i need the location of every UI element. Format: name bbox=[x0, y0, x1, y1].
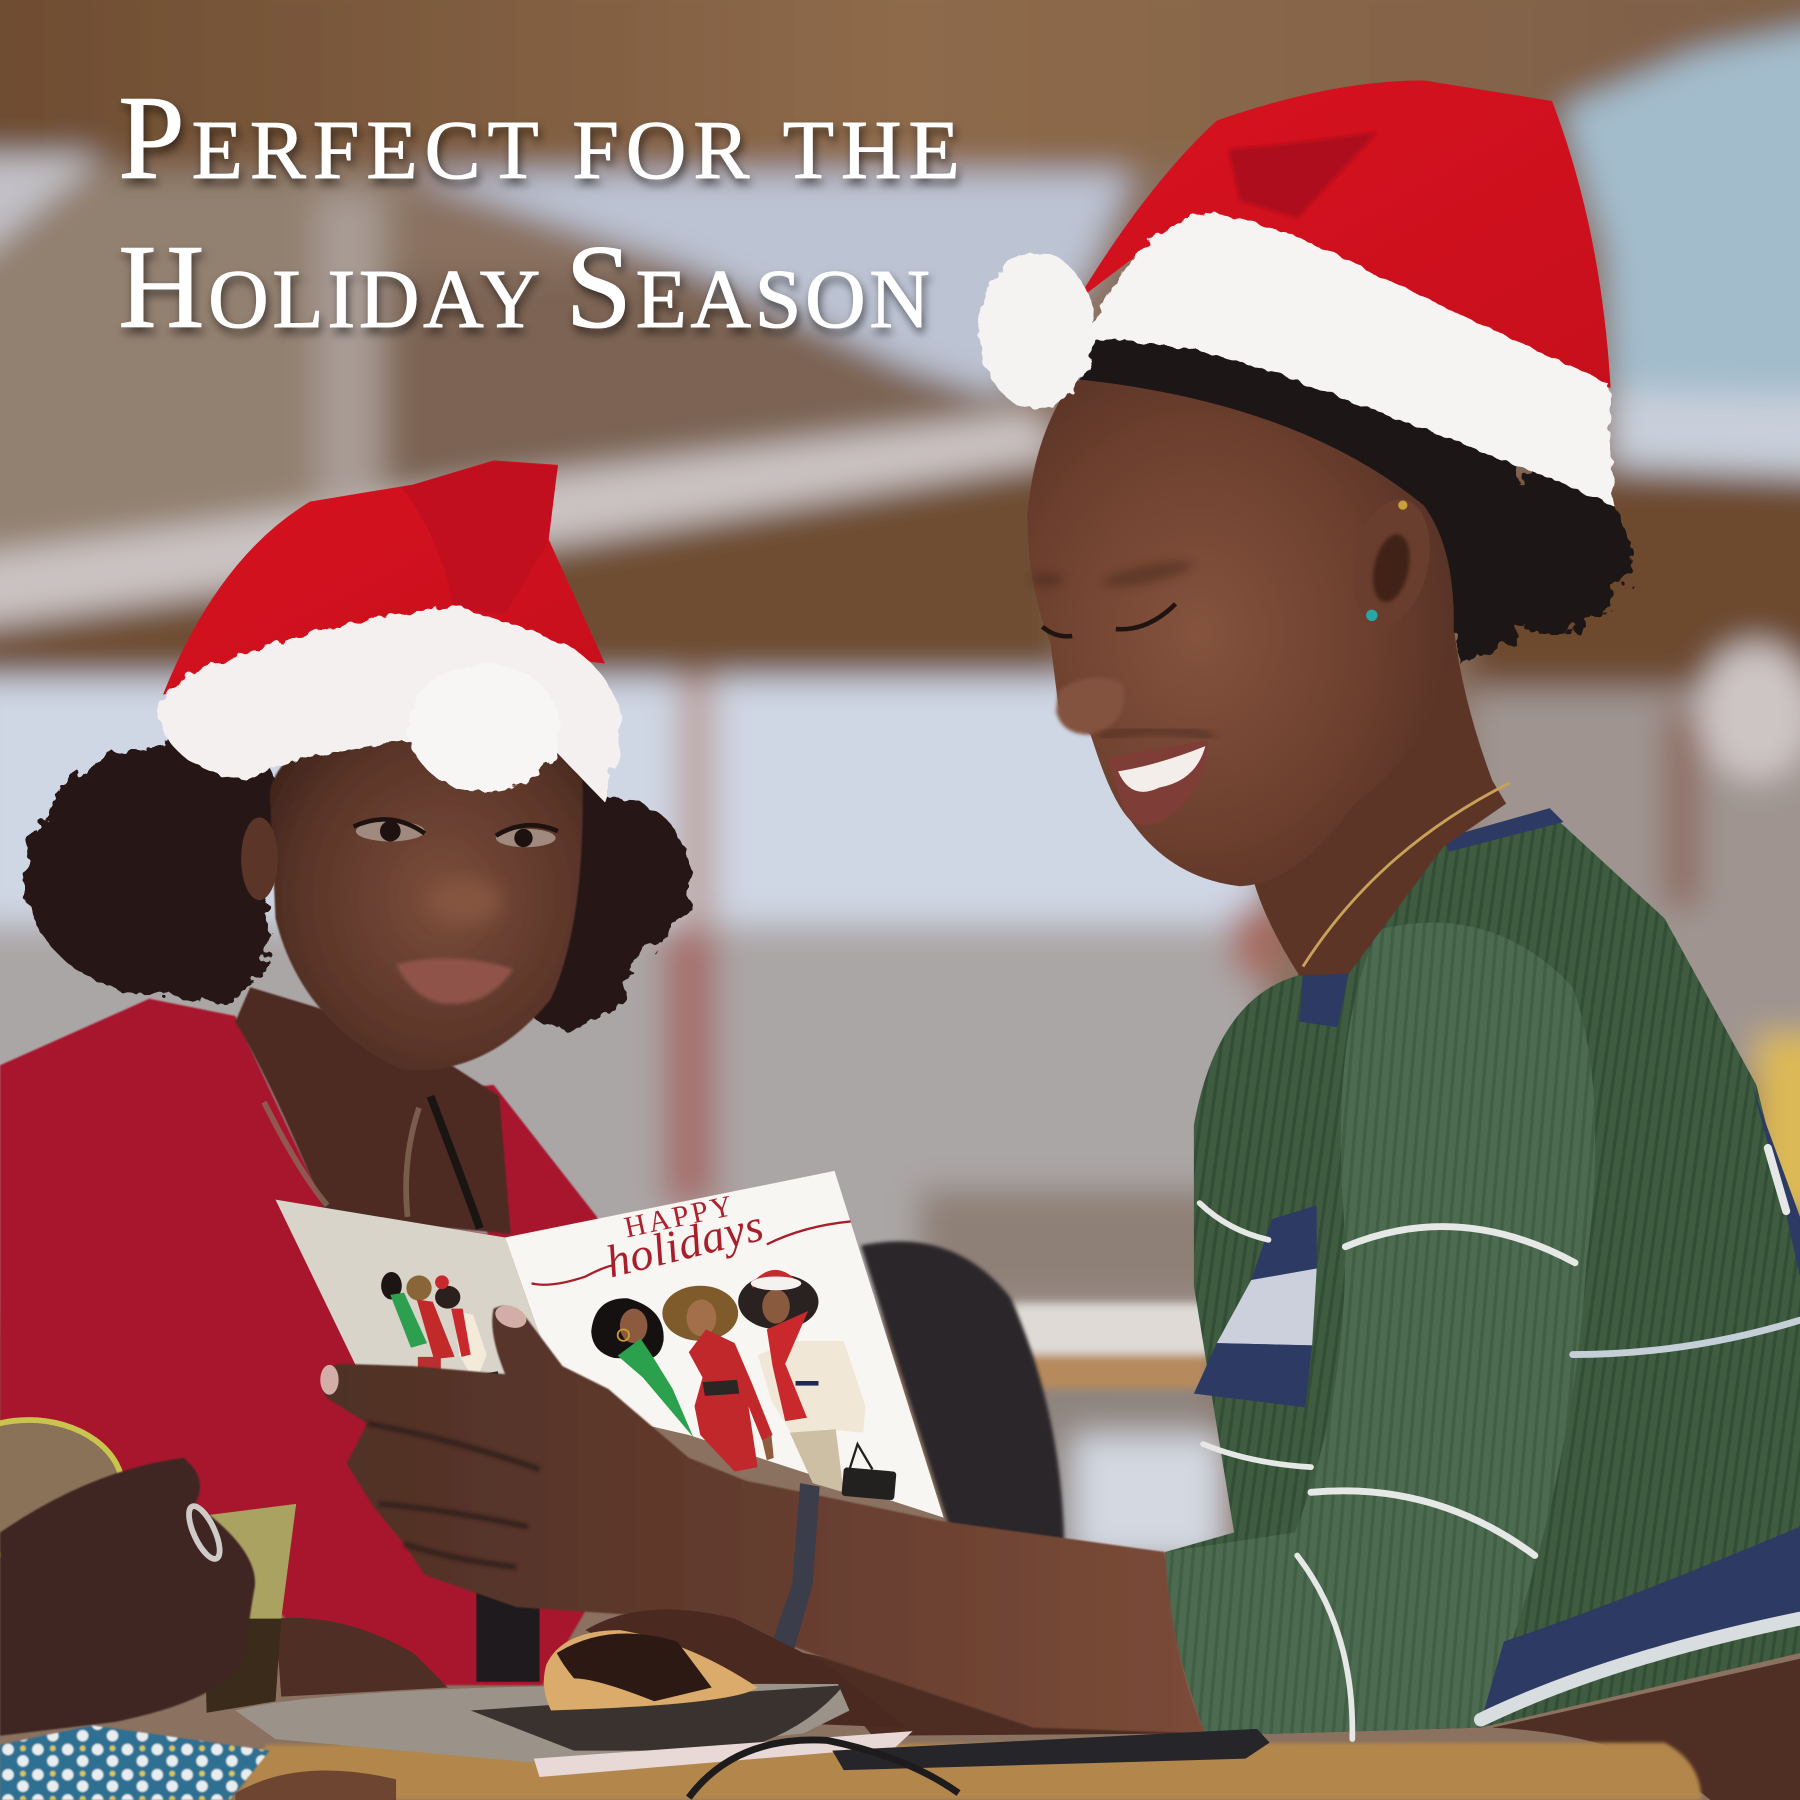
sweater white stripes bbox=[1200, 1148, 1800, 1739]
title line one: PERFECT FOR THE bbox=[118, 72, 960, 204]
hand under plate bbox=[585, 1609, 907, 1728]
sweater sleeve bbox=[1165, 923, 1595, 1736]
sweater torso bbox=[1165, 813, 1800, 1736]
left woman forearm bbox=[276, 1618, 448, 1697]
patterned cloth bbox=[0, 1725, 270, 1800]
right woman teeth bbox=[1118, 746, 1205, 792]
card back mini figures bbox=[381, 1272, 501, 1392]
right woman face bbox=[1027, 379, 1454, 886]
right woman neck bbox=[1251, 608, 1506, 976]
hat white band bbox=[1091, 212, 1613, 505]
finger separators bbox=[367, 1423, 540, 1567]
hat fold shadow bbox=[1228, 132, 1378, 218]
right woman hair bbox=[1073, 310, 1630, 664]
right woman closed eyes bbox=[1042, 604, 1176, 636]
right woman santa hat bbox=[979, 80, 1613, 505]
right woman bbox=[320, 80, 1800, 1800]
dark figure behind card bbox=[861, 1241, 1064, 1544]
collar navy bbox=[1299, 808, 1564, 1027]
card front panel bbox=[505, 1171, 944, 1518]
hat pompom bbox=[979, 253, 1094, 409]
right woman nose bbox=[1056, 678, 1124, 735]
hat fold bbox=[402, 461, 558, 614]
table bar behind bbox=[1012, 1303, 1219, 1389]
pastry bbox=[544, 1630, 758, 1710]
hat pompom bbox=[409, 664, 560, 792]
left woman eyes bbox=[354, 819, 558, 847]
hat white band bbox=[158, 606, 621, 800]
left woman santa hat bbox=[158, 460, 621, 800]
bottom strap bbox=[235, 1771, 396, 1800]
right woman eyebrow shade bbox=[1031, 555, 1195, 593]
left woman bbox=[0, 460, 691, 1697]
necklace bbox=[1303, 783, 1510, 967]
left woman ear bbox=[241, 817, 278, 900]
dark fabric under arm bbox=[476, 1590, 540, 1682]
card back panel bbox=[276, 1200, 565, 1449]
card figure green bbox=[591, 1298, 693, 1437]
title bbox=[118, 72, 960, 353]
right woman ear bbox=[1342, 492, 1441, 633]
glasses bbox=[689, 1740, 959, 1798]
title line two: HOLIDAY SEASON bbox=[118, 221, 930, 353]
left woman necklace bbox=[264, 1102, 419, 1217]
white phone bbox=[534, 1731, 913, 1777]
card figure red dress bbox=[662, 1286, 774, 1472]
sweater navy torso band bbox=[1194, 1205, 1317, 1407]
yellow plate left bbox=[0, 1420, 123, 1558]
black phone bbox=[832, 1729, 1270, 1770]
left hand with ring bbox=[0, 1458, 255, 1736]
left woman face bbox=[270, 723, 583, 1070]
sweater lower navy band bbox=[1481, 1527, 1800, 1722]
plastic cup bbox=[204, 1504, 296, 1713]
hat red body bbox=[1077, 80, 1611, 388]
card swash bbox=[532, 1221, 851, 1285]
bracelet bbox=[771, 1483, 820, 1648]
card heading HAPPY: HAPPY bbox=[621, 1189, 738, 1244]
table bbox=[235, 1743, 1701, 1800]
foil and plate bbox=[235, 1684, 849, 1762]
right woman smile bbox=[1108, 740, 1208, 825]
left woman hair bbox=[23, 732, 691, 1027]
finger nails bbox=[320, 1302, 529, 1395]
card figure cream sweater bbox=[738, 1270, 897, 1500]
skin under arm bbox=[804, 1653, 1205, 1736]
right woman lower skin bbox=[1492, 1659, 1800, 1800]
left woman lips bbox=[396, 958, 513, 1004]
hat red cone bbox=[163, 460, 605, 695]
sweater right navy stripe bbox=[1752, 1085, 1800, 1277]
arm and hand bbox=[322, 1306, 1205, 1733]
left woman neck bbox=[235, 987, 511, 1234]
left woman red top bbox=[0, 999, 654, 1685]
left woman necklace strap bbox=[430, 1096, 480, 1228]
right woman smile crease bbox=[1100, 730, 1212, 737]
greeting card bbox=[276, 1171, 944, 1518]
earrings bbox=[1366, 501, 1407, 621]
card script holidays: holidays bbox=[601, 1199, 769, 1287]
left woman nose bbox=[428, 878, 502, 924]
